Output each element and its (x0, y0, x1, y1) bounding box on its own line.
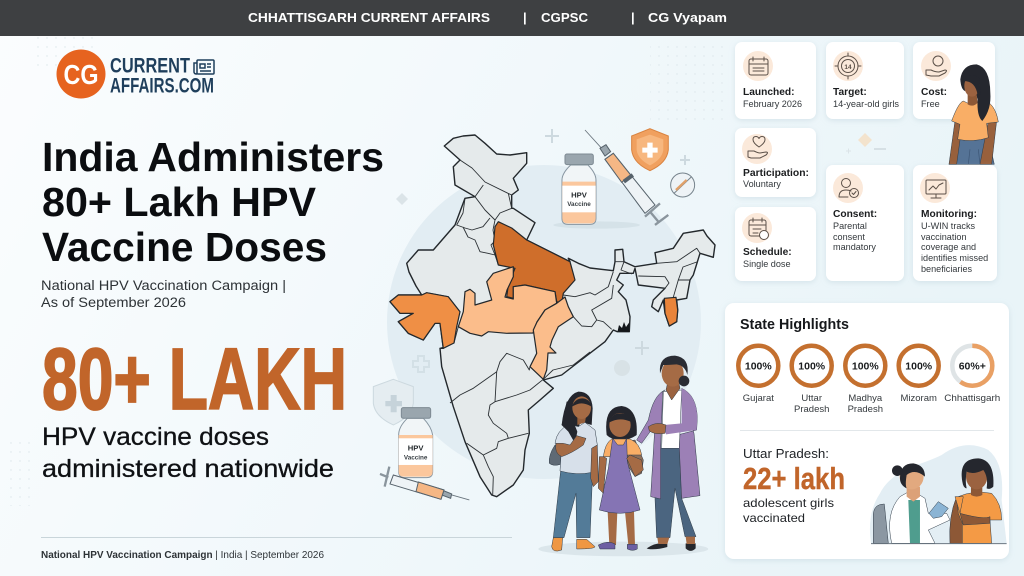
card: Schedule: Single dose (743, 259, 791, 269)
subtitle: National HPV Vaccination Campaign | (41, 278, 286, 293)
callout: Uttar Pradesh 22+ lakh: Uttar Pradesh: (743, 446, 829, 461)
card: Monitoring: identifies missed (921, 253, 988, 263)
card: Schedule: Schedule: (743, 247, 792, 258)
school girl with backpack (549, 392, 598, 551)
card: Target: 14 (844, 64, 852, 71)
syringe lower (380, 467, 469, 500)
card: Launched (735, 42, 816, 119)
plus decorations (413, 129, 690, 372)
map: Mizoram (664, 297, 678, 326)
map: Gujarat (390, 293, 460, 348)
dot pattern lower left (3, 441, 30, 506)
logo (56, 50, 214, 98)
card: Participation: Voluntary (743, 179, 781, 189)
callout: Uttar Pradesh 22+ lakh: vaccinated (743, 511, 805, 525)
logo: AFFAIRS.COM (110, 74, 214, 98)
header bar: CHHATTISGARH CURRENT AFFAIRS (248, 10, 490, 25)
callout: Uttar Pradesh 22+ lakh: adolescent girls (743, 496, 834, 510)
header bar: | (631, 10, 635, 25)
woman in cardigan (637, 356, 700, 551)
card: Schedule (735, 207, 816, 281)
card: Monitoring: beneficiaries (921, 264, 973, 274)
dot pattern top centre-right (650, 40, 725, 120)
callout: Uttar Pradesh 22+ lakh: 22+ lakh (743, 461, 845, 496)
no-needle badge (671, 173, 695, 197)
ring: Madhya Pradesh: Pradesh (848, 404, 883, 415)
title: India Administers (42, 134, 384, 180)
dot pattern top left (32, 36, 96, 72)
card: Target (826, 42, 904, 119)
syringe top (585, 130, 668, 225)
shield icon (632, 129, 668, 171)
title (42, 134, 384, 270)
card: Monitoring: vaccination (921, 232, 966, 242)
map: Chhattisgarh (530, 297, 573, 379)
ring: Mizoram (899, 346, 939, 404)
callout: Uttar Pradesh 22+ lakh (743, 446, 845, 525)
vial top: Vaccine (567, 201, 591, 208)
ring: Uttar Pradesh: 100% (798, 360, 826, 372)
ring: Chhattisgarh: 60%+ (959, 360, 986, 372)
ring: Gujarat (738, 346, 778, 404)
card: Cost (913, 42, 995, 119)
ring: Chhattisgarh: Chhattisgarh (944, 393, 1000, 404)
vial top (553, 154, 640, 229)
card: Cost: Free (921, 99, 940, 109)
logo: CG (64, 59, 98, 90)
ring: Gujarat: Gujarat (743, 393, 774, 404)
ring: Madhya Pradesh: Madhya (848, 393, 883, 404)
title: Vaccine Doses (42, 224, 327, 270)
card: Participation (735, 128, 816, 197)
card: Target: Target: (833, 87, 867, 98)
header bar: | (523, 10, 527, 25)
map backdrop circle (387, 165, 701, 479)
card: Monitoring: U-WIN tracks (921, 221, 976, 231)
heading: State Highlights: State Highlights (740, 317, 849, 333)
header bar: CGPSC (541, 10, 589, 25)
map: Uttar Pradesh (493, 222, 575, 303)
ring: Mizoram: Mizoram (900, 393, 937, 404)
ring: Uttar Pradesh: Uttar (801, 393, 822, 404)
girl in orange top (949, 64, 998, 164)
map: Madhya Pradesh (458, 267, 557, 336)
diamond decoration (396, 193, 408, 205)
card: Consent: Consent: (833, 209, 877, 220)
big number caption (42, 423, 334, 483)
card: Monitoring (913, 165, 997, 281)
map: Sundarbans delta (618, 322, 630, 332)
vaccination illustration (870, 445, 1007, 544)
title: 80+ Lakh HPV (42, 179, 317, 225)
vial lower: HPV (408, 444, 424, 453)
big number: 80+ LAKH (42, 331, 347, 428)
header bar: CG Vyapam (648, 10, 727, 25)
sphere decoration (614, 360, 630, 376)
card: Consent: mandatory (833, 242, 876, 252)
card: Participation: Participation: (743, 168, 809, 179)
vial lower (399, 408, 433, 478)
card: Monitoring: Monitoring: (921, 209, 977, 220)
subtitle (41, 278, 286, 310)
map: India outline (390, 135, 715, 497)
big number caption: HPV vaccine doses (42, 423, 269, 451)
card: Monitoring: coverage and (921, 242, 976, 252)
ring: Madhya Pradesh (845, 346, 885, 415)
card: Consent (826, 165, 904, 281)
subtitle: As of September 2026 (41, 295, 186, 310)
ring: Madhya Pradesh: 100% (852, 360, 879, 372)
header bar (0, 0, 1024, 36)
card: Launched: February 2026 (743, 99, 802, 109)
footer: National HPV Vaccination Campaign | India | September 2026 (41, 549, 324, 561)
India map (390, 135, 715, 497)
vial top: HPV (571, 190, 588, 199)
vial lower: Vaccine (404, 454, 428, 461)
card: Consent: Parental (833, 221, 867, 231)
ring: Uttar Pradesh (792, 346, 832, 415)
sparkle decoration (846, 133, 886, 154)
ring: Chhattisgarh (944, 346, 1000, 404)
card: Cost: Cost: (921, 87, 947, 98)
family illustration (538, 356, 708, 556)
card: Target: 14-year-old girls (833, 99, 899, 109)
ring: Uttar Pradesh: Pradesh (794, 404, 829, 415)
card: Consent: consent (833, 232, 865, 242)
logo: CURRENT (110, 54, 190, 78)
ring: Gujarat: 100% (745, 360, 772, 372)
big number caption: administered nationwide (42, 455, 334, 483)
panel: state highlights (725, 303, 1009, 559)
younger girl in purple dress (598, 406, 643, 550)
ring: Mizoram: 100% (905, 360, 933, 372)
map: state boundaries (422, 160, 700, 495)
card: Launched: Launched: (743, 87, 795, 98)
faded shield (373, 379, 413, 425)
